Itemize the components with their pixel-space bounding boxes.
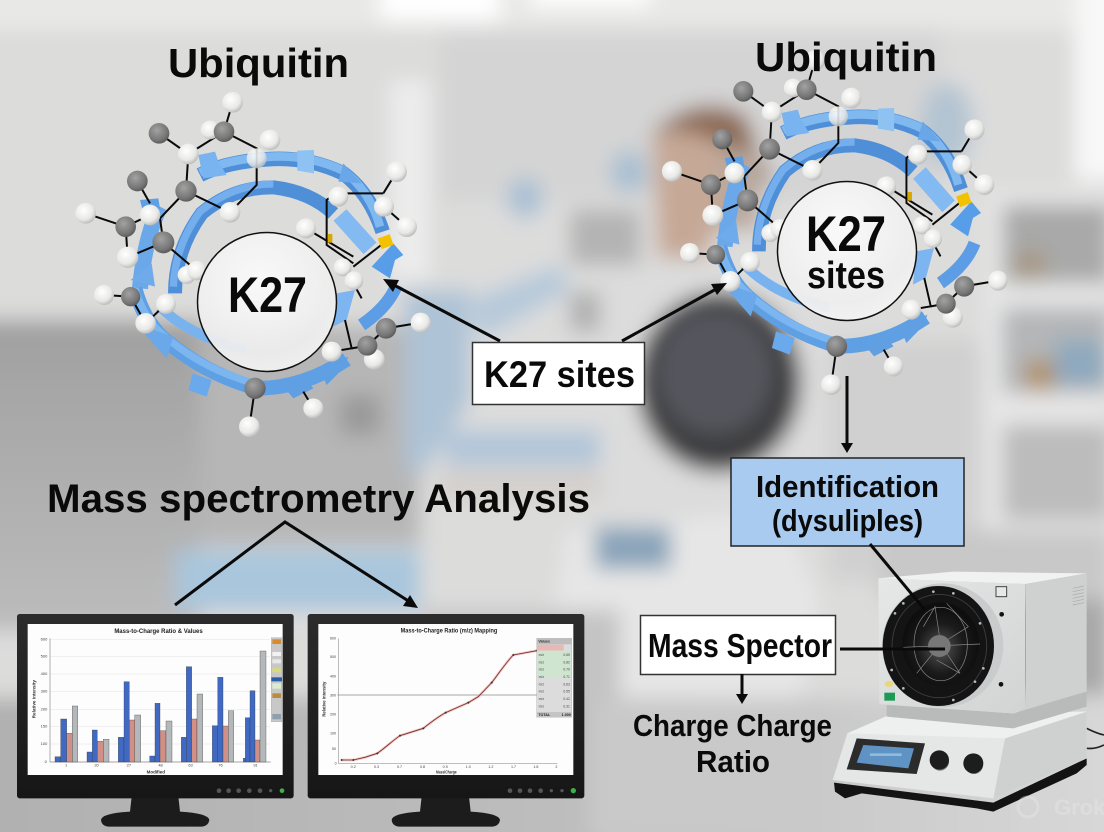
- K27 central disc: K27: [228, 267, 307, 323]
- K27 sites central disc: K27: [806, 206, 886, 262]
- connector: identification to instrument: [870, 544, 925, 610]
- monitor stand: [101, 797, 209, 827]
- text: Charge Charge Ratio: [633, 708, 832, 779]
- molecule: left ubiquitin with K27: [75, 92, 431, 437]
- monitor: line chart: 400: [330, 674, 336, 678]
- callout: Mass Spector: Mass Spector: [648, 627, 832, 664]
- monitor: bar chart: 27: [127, 763, 132, 768]
- data table: 0.71: [563, 675, 570, 679]
- K27 sites central disc: [778, 182, 916, 320]
- monitor: bar chart: 63: [188, 763, 194, 768]
- K27 sites central disc: sites: [807, 255, 885, 297]
- base unit: [833, 712, 1087, 812]
- chamber housing: [878, 572, 1087, 728]
- data table: m/z: [539, 653, 544, 657]
- arrow: label to right molecule: [622, 283, 727, 341]
- callout: K27 sites: [472, 342, 644, 404]
- monitor: line chart: 500: [330, 655, 336, 659]
- data table: Values: [538, 640, 550, 644]
- monitor: bar chart: 20: [94, 763, 100, 768]
- data table: m/z: [539, 697, 544, 701]
- data table: m/z: [539, 682, 544, 686]
- data table: m/z: [539, 690, 544, 694]
- data table: 0.55: [563, 690, 570, 694]
- heading: Ubiquitin left: Ubiquitin: [168, 40, 349, 86]
- monitor: line chart: 1.7: [511, 765, 516, 769]
- chart title: Mass-to-Charge Ratio (m/z) Mapping: [401, 629, 498, 635]
- monitor: line chart: 1.8: [533, 765, 538, 769]
- monitor: bar chart: 200: [41, 706, 48, 711]
- monitor: bar chart: 100: [41, 741, 48, 746]
- monitor: line chart: Mass/Charge: [436, 769, 457, 774]
- data table: 1.000: [562, 713, 571, 717]
- monitor: line chart: 300: [330, 693, 336, 697]
- arrows: analysis to monitors: [175, 522, 418, 608]
- callout: Mass Spector: [640, 616, 836, 674]
- heading: Ubiquitin right: Ubiquitin: [755, 34, 937, 80]
- monitor frame: [308, 614, 584, 798]
- instrument: mass spectrometer: [833, 572, 1104, 812]
- monitor: line chart: 200: [330, 712, 336, 716]
- data table: 0.31: [563, 704, 570, 708]
- data table: TOTAL: [538, 713, 551, 717]
- monitor frame: [17, 614, 294, 798]
- box: Identification: (dysuliples): [772, 503, 923, 538]
- monitor: line chart: 2: [555, 765, 557, 769]
- monitor: line chart: 1.0: [466, 765, 471, 769]
- monitor: bar chart: 600: [41, 636, 48, 641]
- monitor: line chart: 50: [332, 747, 336, 751]
- cable: [1087, 728, 1104, 749]
- box: Identification: Identification: [756, 469, 939, 504]
- watermark: Grok: Grok: [1054, 795, 1104, 820]
- K27 central disc: [198, 232, 336, 372]
- chart screen: [28, 624, 283, 775]
- monitor: bar chart: Modified: [147, 769, 165, 774]
- data table: m/z: [539, 660, 544, 664]
- chart legend: [271, 638, 282, 722]
- chart axis labels: Relative Intensity: [32, 680, 37, 718]
- monitor: bar chart: 500: [41, 654, 48, 659]
- monitor: line chart: 0.8: [420, 765, 425, 769]
- watermark: Grok: [1018, 795, 1104, 820]
- arrow: label to left molecule: [383, 279, 500, 341]
- box: Identification: [731, 458, 964, 546]
- monitor: line chart: 1.2: [488, 765, 493, 769]
- data table: m/z: [539, 704, 544, 708]
- monitor: line chart: 0.7: [397, 765, 402, 769]
- monitor: bar chart: 400: [41, 671, 48, 676]
- knobs: [930, 750, 983, 774]
- data table: 0.79: [563, 668, 570, 672]
- monitor: bar chart: 150: [41, 724, 48, 729]
- bars: [55, 651, 266, 762]
- monitor: line chart: 600: [330, 637, 336, 641]
- heading: Mass spectrometry Analysis: Mass spectrometry Analysis: [47, 477, 590, 521]
- data table: m/z: [539, 675, 544, 679]
- monitor: bar chart: 0: [45, 759, 48, 764]
- chart title: Mass-to-Charge Ratio & Values: [114, 629, 203, 635]
- monitor: line chart: 0: [335, 762, 337, 766]
- chart axis labels: Relative Intensity: [322, 681, 327, 717]
- line series: [342, 651, 537, 760]
- connector: Mass Spector to instrument: [840, 648, 945, 650]
- monitor stand: [392, 797, 500, 827]
- monitor: bar chart: 1: [65, 763, 68, 768]
- monitor: bar chart: 76: [218, 763, 224, 768]
- arrow: Mass Spector to ratio: [736, 674, 748, 704]
- arrow: right molecule to identification: [841, 376, 853, 453]
- monitor: line chart: 100: [330, 731, 336, 735]
- display: [847, 738, 925, 774]
- data table: m/z: [539, 668, 544, 672]
- data table: 0.82: [563, 660, 570, 664]
- monitor buttons: [508, 788, 576, 793]
- data table: 0.85: [563, 653, 570, 657]
- chart screen: [318, 624, 573, 775]
- callout: K27 sites: K27 sites: [484, 354, 635, 395]
- monitor: line chart: 0.2: [351, 765, 356, 769]
- text: Charge Charge Ratio: Ratio: [696, 744, 770, 779]
- molecule: right ubiquitin with K27 sites: [662, 50, 1008, 395]
- monitor: bar chart: 91: [253, 763, 259, 768]
- text: Charge Charge Ratio: Charge Charge: [633, 708, 832, 743]
- monitor: line chart: 0.3: [374, 765, 379, 769]
- monitor: bar chart: 48: [158, 763, 164, 768]
- data table: 0.63: [563, 682, 570, 686]
- data table: 0.42: [563, 697, 570, 701]
- monitor buttons: [217, 788, 284, 793]
- monitor: line chart: 0.9: [443, 765, 448, 769]
- monitor: bar chart: 300: [41, 689, 48, 694]
- monitor: line chart: [308, 614, 584, 827]
- monitor: bar chart: [17, 614, 294, 827]
- data table: [537, 638, 572, 717]
